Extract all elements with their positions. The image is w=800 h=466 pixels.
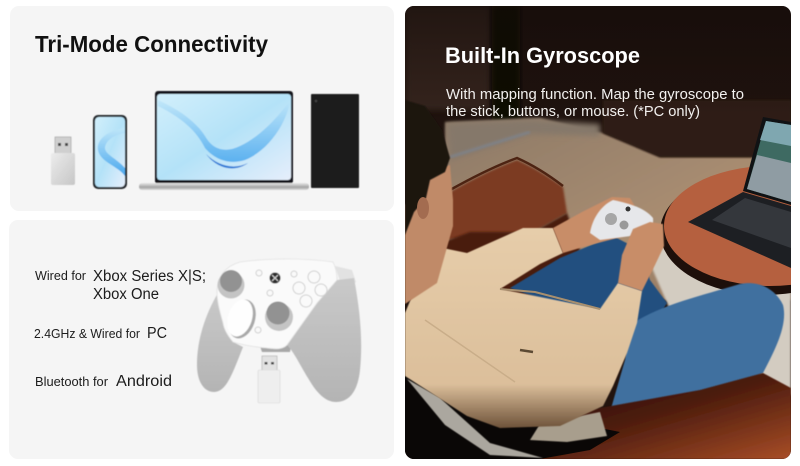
photo: gamer with controller in living room: [405, 6, 800, 459]
text: 2.4ghz and wired for pc: 2.4GHz & Wired for: [34, 327, 140, 341]
icon: laptop: [139, 91, 309, 190]
controller in hands: [590, 200, 653, 240]
hair: [405, 100, 450, 235]
dark jeans: [510, 238, 668, 321]
text: wired for xbox: [35, 268, 206, 303]
sweater: [405, 228, 642, 428]
dark pillow: [405, 374, 620, 459]
laptop: [743, 117, 791, 205]
text: bluetooth for android: [35, 373, 172, 390]
heading: built-in gyroscope: Built-In Gyroscope: [445, 43, 640, 68]
icon: game controller: [197, 259, 361, 402]
text: wired for xbox: Xbox One: [93, 286, 159, 303]
floor: [445, 118, 791, 300]
text: wired for xbox: Wired for: [35, 269, 86, 283]
text: bluetooth for android: Android: [116, 373, 172, 390]
carpet: [540, 372, 791, 459]
icon: game console: [311, 94, 359, 188]
ear: [417, 197, 429, 219]
text: gyroscope description: [446, 87, 744, 120]
text: gyroscope description: With mapping function. Map the gyroscope to: [446, 87, 744, 103]
icon: smartphone: [93, 115, 127, 189]
text: 2.4ghz and wired for pc: [34, 325, 167, 342]
sofa cushion: [443, 160, 567, 240]
left hand: [553, 197, 640, 253]
text: gyroscope description: the stick, buttons, or mouse. (*PC only): [446, 104, 700, 120]
text: bluetooth for android: Bluetooth for: [35, 375, 108, 389]
text: wired for xbox: Xbox Series X|S;: [93, 268, 206, 285]
icon: usb dongle: [51, 137, 75, 185]
icon: wireless usb dongle: [258, 356, 280, 403]
text: 2.4ghz and wired for pc: PC: [147, 325, 167, 342]
heading: tri-mode connectivity: Tri-Mode Connectivity: [35, 31, 268, 57]
white rug: [652, 248, 791, 396]
wooden cabinet: [603, 100, 791, 157]
panel: tri-mode connectivity: [10, 6, 394, 211]
right hand: [618, 222, 664, 291]
neck and face: [405, 165, 453, 304]
panel: built-in gyroscope: [405, 6, 800, 459]
panel: platform compatibility: [9, 220, 394, 459]
round table: [660, 198, 791, 295]
jeans knee: [610, 283, 784, 412]
